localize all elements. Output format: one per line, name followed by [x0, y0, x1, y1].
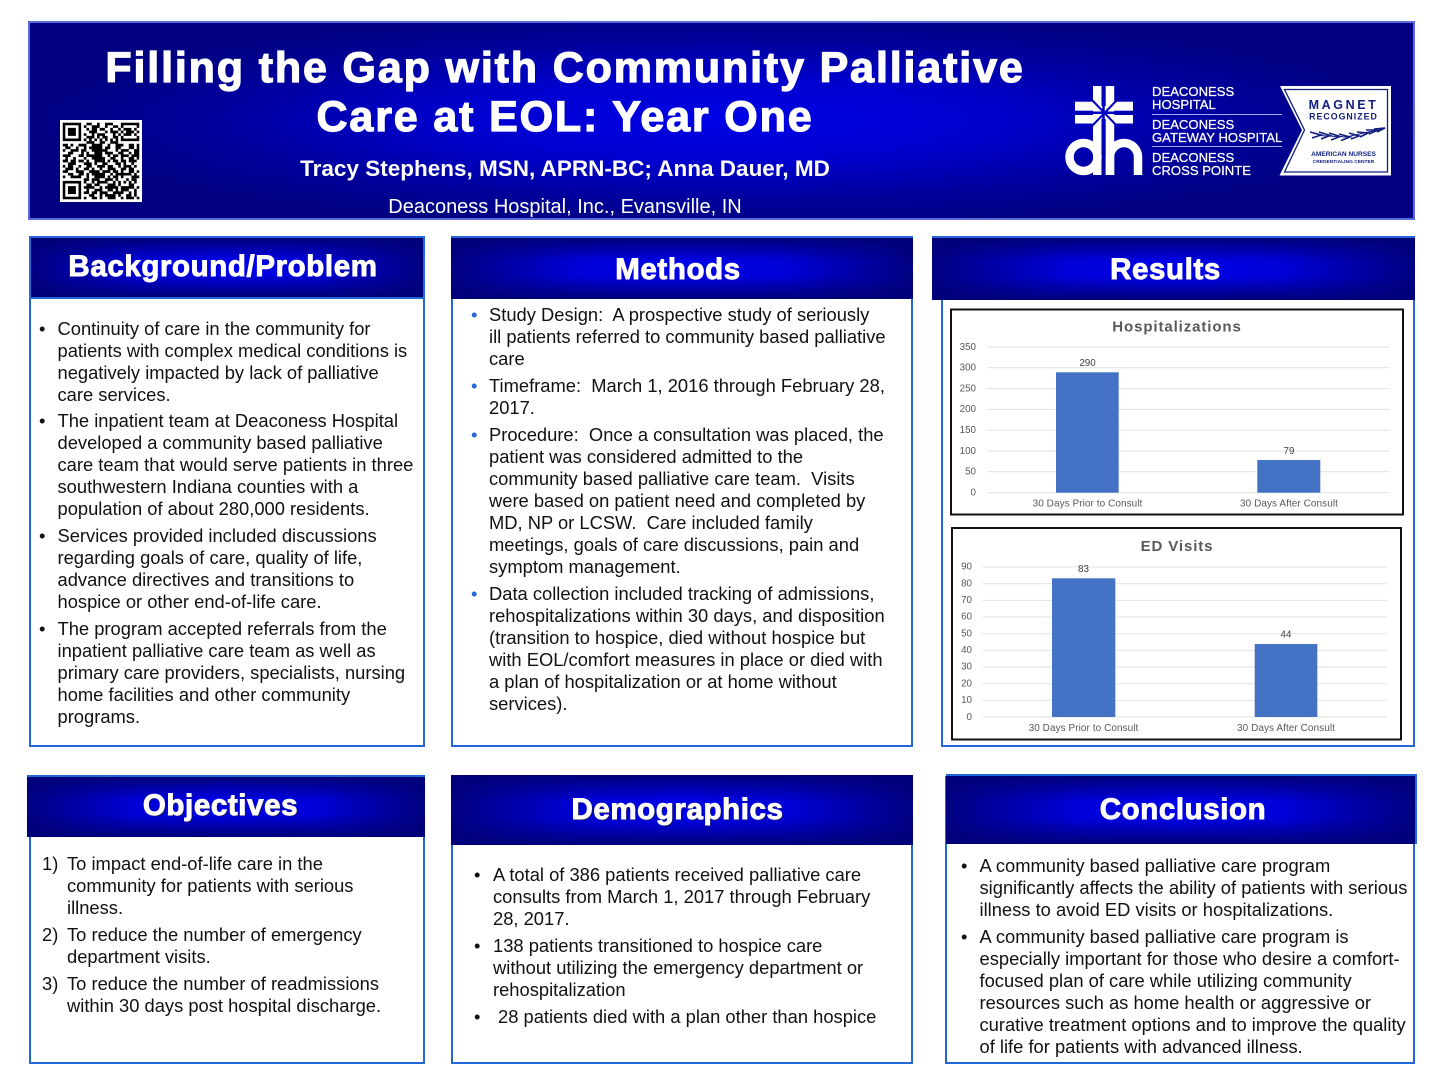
text block: demographics bullets: • [474, 864, 480, 885]
text block: objectives list: 3) [42, 973, 58, 994]
bullet 4: inpatient palliative care team as well as [58, 640, 376, 661]
bullet: procedure [471, 424, 884, 577]
bullet 3 [39, 525, 377, 612]
bullet 2: especially important for those who desire a comfort- [980, 948, 1400, 969]
heading: results: Results [1110, 253, 1221, 286]
text block: objectives list: 2) [42, 924, 58, 945]
bars [1052, 578, 1317, 717]
logo text: hospital names: DEACONESS [1152, 117, 1234, 132]
bullet: hospice transition: rehospitalization [493, 979, 626, 1000]
y axis labels: 50 [965, 466, 977, 478]
title: Filling the Gap with Community Palliative [105, 44, 1025, 92]
heading: methods: Methods [615, 253, 741, 286]
icon: Magnet recognized badge: AMERICAN NURSES [1311, 151, 1377, 158]
bullet: procedure: Procedure: Once a consultation was placed, the [489, 424, 884, 445]
bullet: timeframe [471, 375, 885, 418]
title banner [28, 21, 1415, 220]
y axis labels [961, 562, 973, 723]
objective 2: To reduce the number of emergency [67, 924, 362, 945]
bullet 2: curative treatment options and to improve the quality [980, 1014, 1406, 1035]
logo text: hospital names: HOSPITAL [1152, 97, 1216, 112]
heading: conclusion: Conclusion [1100, 793, 1266, 826]
heading: background/problem: Background/Problem [68, 250, 378, 283]
y axis labels: 250 [960, 384, 977, 394]
panel: background/problem [29, 236, 425, 747]
bullet: other plan: 28 patients died with a plan other than hospice [498, 1006, 876, 1027]
bullet 1: patients with complex medical conditions is [58, 340, 407, 361]
y axis labels: 200 [960, 404, 977, 415]
bullet 2: developed a community based palliative [58, 432, 383, 453]
y axis labels: 20 [961, 678, 973, 690]
panel: demographics [451, 775, 913, 1064]
value labels: 290 [1079, 358, 1096, 369]
text block: methods bullets: • [471, 375, 477, 396]
value labels: 44 [1281, 630, 1292, 640]
category labels: 30 Days After Consult [1237, 723, 1335, 734]
bullet 1: care services. [58, 384, 171, 405]
y axis labels: 40 [961, 645, 973, 656]
panel: results [941, 236, 1415, 747]
y axis labels: 0 [967, 712, 973, 723]
heading: background/problem [29, 236, 425, 299]
bullet: hospice transition: without utilizing the emergency department or [493, 957, 863, 978]
y axis labels: 350 [960, 342, 977, 353]
bullet 4: primary care providers, specialists, nursing [58, 662, 405, 683]
title: Care at EOL: Year One [317, 93, 813, 141]
objective 2: department visits. [67, 946, 211, 967]
text block: methods bullets: • [471, 583, 477, 604]
value labels [1078, 564, 1292, 640]
bullet: hospice transition: 138 patients transitioned to hospice care [493, 935, 822, 956]
text block: conclusion bullets [961, 855, 1407, 1057]
bullet 1: negatively impacted by lack of palliative [58, 362, 379, 383]
bullet 4: programs. [58, 706, 140, 727]
bullet: study design [471, 304, 886, 369]
heading: objectives [27, 775, 425, 837]
title [105, 44, 1025, 141]
text block: demographics bullets: • [474, 935, 480, 956]
bullet: timeframe: 2017. [489, 397, 535, 418]
bullet: study design: care [489, 348, 525, 369]
bullet 4: home facilities and other community [58, 684, 350, 705]
text block: background bullets: • [39, 525, 45, 546]
bullet 2 [39, 410, 413, 519]
icon: Magnet recognized badge: CREDENTIALING CENTER [1313, 159, 1375, 165]
heading: methods [451, 236, 913, 299]
bullet: study design: Study Design: A prospective study of seriously [489, 304, 869, 325]
icon: QR code [60, 120, 142, 202]
bullet: study design: ill patients referred to community based palliative [489, 326, 886, 347]
logo text: hospital names: DEACONESS [1152, 84, 1234, 99]
bullet 2: resources such as home health or aggressive or [980, 992, 1371, 1013]
bullet 1: A community based palliative care program [980, 855, 1330, 876]
bullet 4: The program accepted referrals from the [58, 618, 387, 639]
bullet 1: illness to avoid ED visits or hospitalizations. [980, 899, 1333, 920]
objective 1: community for patients with serious [67, 875, 353, 896]
y axis labels: 60 [961, 612, 973, 622]
y axis labels: 10 [961, 695, 973, 706]
objective 3: within 30 days post hospital discharge. [67, 995, 381, 1016]
bullet: timeframe: Timeframe: March 1, 2016 through February 28, [489, 375, 885, 396]
text block: methods bullets [471, 304, 886, 714]
heading: demographics: Demographics [571, 793, 784, 826]
text block: background bullets [39, 318, 413, 727]
panel: methods [451, 236, 913, 747]
category labels [1029, 723, 1335, 734]
affiliation: Deaconess Hospital, Inc., Evansville, IN [388, 196, 742, 218]
y axis labels: 50 [961, 628, 973, 640]
bullet: procedure: were based on patient need and completed by [489, 490, 865, 511]
text block: objectives list [42, 853, 381, 1016]
bullet 3: hospice or other end-of-life care. [58, 591, 322, 612]
bullet: data collection: rehospitalizations within 30 days, and disposition [489, 605, 885, 626]
logo text: hospital names: DEACONESS [1152, 150, 1234, 165]
bullet: data collection: services). [489, 693, 567, 714]
y axis labels: 0 [971, 488, 977, 498]
objective 1: To impact end-of-life care in the [67, 853, 323, 874]
icon: Deaconess dh logo [1065, 86, 1142, 176]
heading: results [932, 236, 1415, 300]
bullet: procedure: meetings, goals of care discussions, pain and [489, 534, 859, 555]
text block: methods bullets: • [471, 424, 477, 445]
bullet 2: focused plan of care while utilizing community [980, 970, 1352, 991]
value labels: 79 [1284, 446, 1294, 457]
bullet 2: population of about 280,000 residents. [58, 498, 370, 519]
heading: conclusion [946, 774, 1417, 844]
bullet: total patients [474, 864, 870, 929]
text block: background bullets: • [39, 318, 45, 339]
bullet 3: advance directives and transitions to [58, 569, 354, 590]
authors: Tracy Stephens, MSN, APRN-BC; Anna Dauer, MD [300, 156, 830, 181]
panel: objectives [29, 775, 425, 1064]
bullet 4 [39, 618, 405, 727]
bullet: total patients: 28, 2017. [493, 908, 570, 929]
text block: demographics bullets [474, 864, 876, 1027]
panel: conclusion [945, 776, 1415, 1064]
chart title: Hospitalizations [1112, 318, 1242, 336]
category labels [1033, 498, 1338, 510]
bullet: total patients: A total of 386 patients received palliative care [493, 864, 861, 885]
objective 3 [42, 973, 381, 1016]
text block: conclusion bullets: • [961, 855, 967, 876]
logo text: hospital names [1152, 84, 1282, 178]
y axis labels: 300 [960, 362, 977, 374]
y axis labels: 70 [961, 595, 973, 606]
bullet 2: A community based palliative care program is [980, 926, 1349, 947]
bullet: procedure: symptom management. [489, 556, 681, 577]
bullet: data collection [471, 583, 885, 714]
bullet: data collection: a plan of hospitalization or at home without [489, 671, 837, 692]
bullet: hospice transition [474, 935, 863, 1000]
bullet: procedure: MD, NP or LCSW. Care included family [489, 512, 813, 533]
bullet: data collection: with EOL/comfort measures in place or died with [489, 649, 883, 670]
text block: background bullets: • [39, 410, 45, 431]
text block: conclusion bullets: • [961, 926, 967, 947]
y axis labels: 100 [960, 446, 977, 457]
y axis labels: 80 [961, 578, 973, 590]
bullet 1 [961, 855, 1407, 920]
objective 2 [42, 924, 362, 967]
chart: ED visits bar chart [951, 527, 1402, 740]
chart: hospitalizations bar chart [950, 308, 1404, 516]
bullet: data collection: Data collection included tracking of admissions, [489, 583, 874, 604]
icon: Magnet recognized badge [1280, 86, 1391, 176]
bullet: total patients: consults from March 1, 2017 through February [493, 886, 870, 907]
bullet: procedure: patient was considered admitted to the [489, 446, 803, 467]
category labels: 30 Days Prior to Consult [1033, 498, 1143, 510]
y axis labels: 30 [961, 662, 973, 672]
logo text: hospital names: GATEWAY HOSPITAL [1152, 130, 1282, 145]
y axis labels: 150 [960, 425, 977, 436]
bullet 2: The inpatient team at Deaconess Hospital [58, 410, 398, 431]
value labels: 83 [1078, 564, 1089, 575]
text block: objectives list: 1) [42, 853, 58, 874]
objective 1 [42, 853, 353, 918]
bullet 1: significantly affects the ability of patients with serious [980, 877, 1407, 898]
objective 1: illness. [67, 897, 123, 918]
chart title: ED Visits [1141, 538, 1213, 555]
bullet 3: Services provided included discussions [58, 525, 377, 546]
icon: Magnet recognized badge: RECOGNIZED [1309, 112, 1378, 122]
heading: demographics [451, 775, 913, 845]
bars [1056, 372, 1320, 493]
text block: background bullets: • [39, 618, 45, 639]
objective 3: To reduce the number of readmissions [67, 973, 379, 994]
bullet 2: care team that would serve patients in three [58, 454, 413, 475]
category labels: 30 Days Prior to Consult [1029, 723, 1139, 734]
logo text: hospital names: CROSS POINTE [1152, 163, 1251, 178]
bullet 3: regarding goals of care, quality of life, [58, 547, 362, 568]
bullet 1 [39, 318, 407, 405]
value labels [1079, 358, 1294, 457]
heading: objectives: Objectives [143, 789, 298, 822]
bullet 2: southwestern Indiana counties with a [58, 476, 358, 497]
bullet 2: of life for patients with advanced illness. [980, 1036, 1303, 1057]
bullet: data collection: (transition to hospice, died without hospice but [489, 627, 865, 648]
category labels: 30 Days After Consult [1240, 498, 1338, 510]
icon: Magnet recognized badge: MAGNET [1309, 98, 1378, 112]
text block: methods bullets: • [471, 304, 477, 325]
y axis labels: 90 [961, 562, 973, 572]
bullet 1: Continuity of care in the community for [58, 318, 370, 339]
bullet: procedure: community based palliative care team. Visits [489, 468, 855, 489]
text block: demographics bullets: • [474, 1006, 480, 1027]
y axis labels [960, 342, 977, 498]
bullet 2 [961, 926, 1406, 1057]
